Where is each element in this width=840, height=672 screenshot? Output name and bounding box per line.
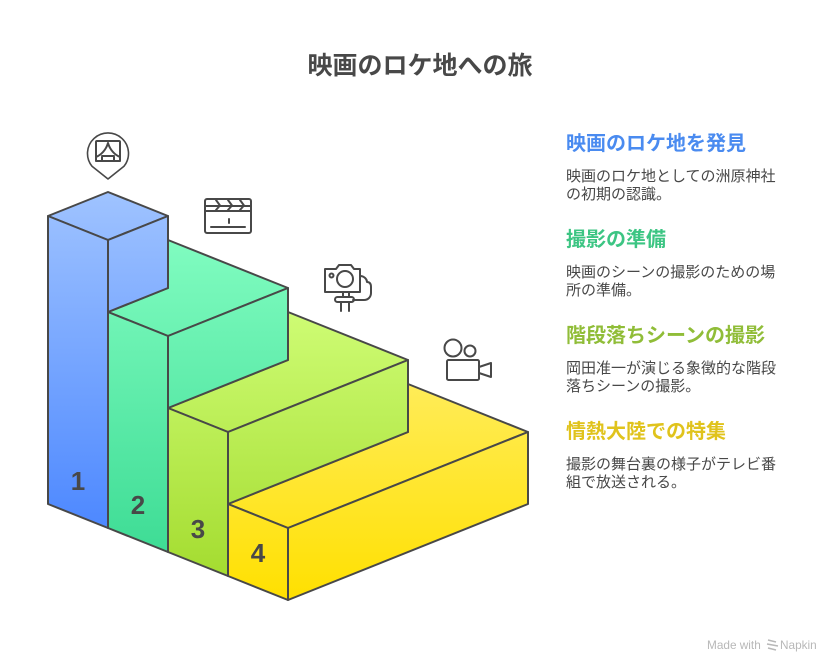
step 3: lime block	[168, 312, 408, 576]
text block 2	[566, 228, 775, 299]
icon: clapperboard	[205, 199, 251, 233]
icon: location pin with stage curtain	[88, 133, 128, 179]
watermark: Made with	[707, 638, 761, 652]
number 2: 2	[131, 490, 145, 520]
step 1: blue block	[48, 192, 168, 528]
text block 4	[566, 420, 776, 491]
number 4: 4	[251, 538, 266, 568]
text block 4: 情熱大陸での特集	[566, 420, 726, 443]
icon: camera on tripod	[325, 265, 371, 311]
text block 2: 所の準備。	[566, 282, 641, 299]
text block 2: 映画のシーンの撮影のための場	[566, 263, 775, 281]
text block 1: 映画のロケ地を発見	[566, 132, 746, 155]
text block 4: 撮影の舞台裏の様子がテレビ番	[566, 455, 776, 473]
title: 映画のロケ地への旅	[307, 52, 533, 80]
icon: video camera	[444, 340, 491, 380]
text block 1: 映画のロケ地としての洲原神社	[566, 168, 776, 185]
text block 2: 撮影の準備	[566, 228, 666, 251]
text block 3	[566, 324, 776, 395]
watermark	[707, 638, 817, 652]
text block 3: 階段落ちシーンの撮影	[566, 324, 765, 347]
text block 3: 岡田准一が演じる象徴的な階段	[566, 360, 776, 377]
text block 1: の初期の認識。	[566, 186, 671, 203]
step 4: yellow block	[228, 384, 528, 600]
text block 3: 落ちシーンの撮影。	[566, 377, 700, 395]
text block 1	[566, 132, 776, 203]
number 3: 3	[191, 514, 205, 544]
watermark: Napkin	[780, 638, 817, 652]
number 1: 1	[71, 466, 85, 496]
text block 4: 組で放送される。	[566, 474, 686, 491]
step 2: green block	[108, 240, 288, 552]
